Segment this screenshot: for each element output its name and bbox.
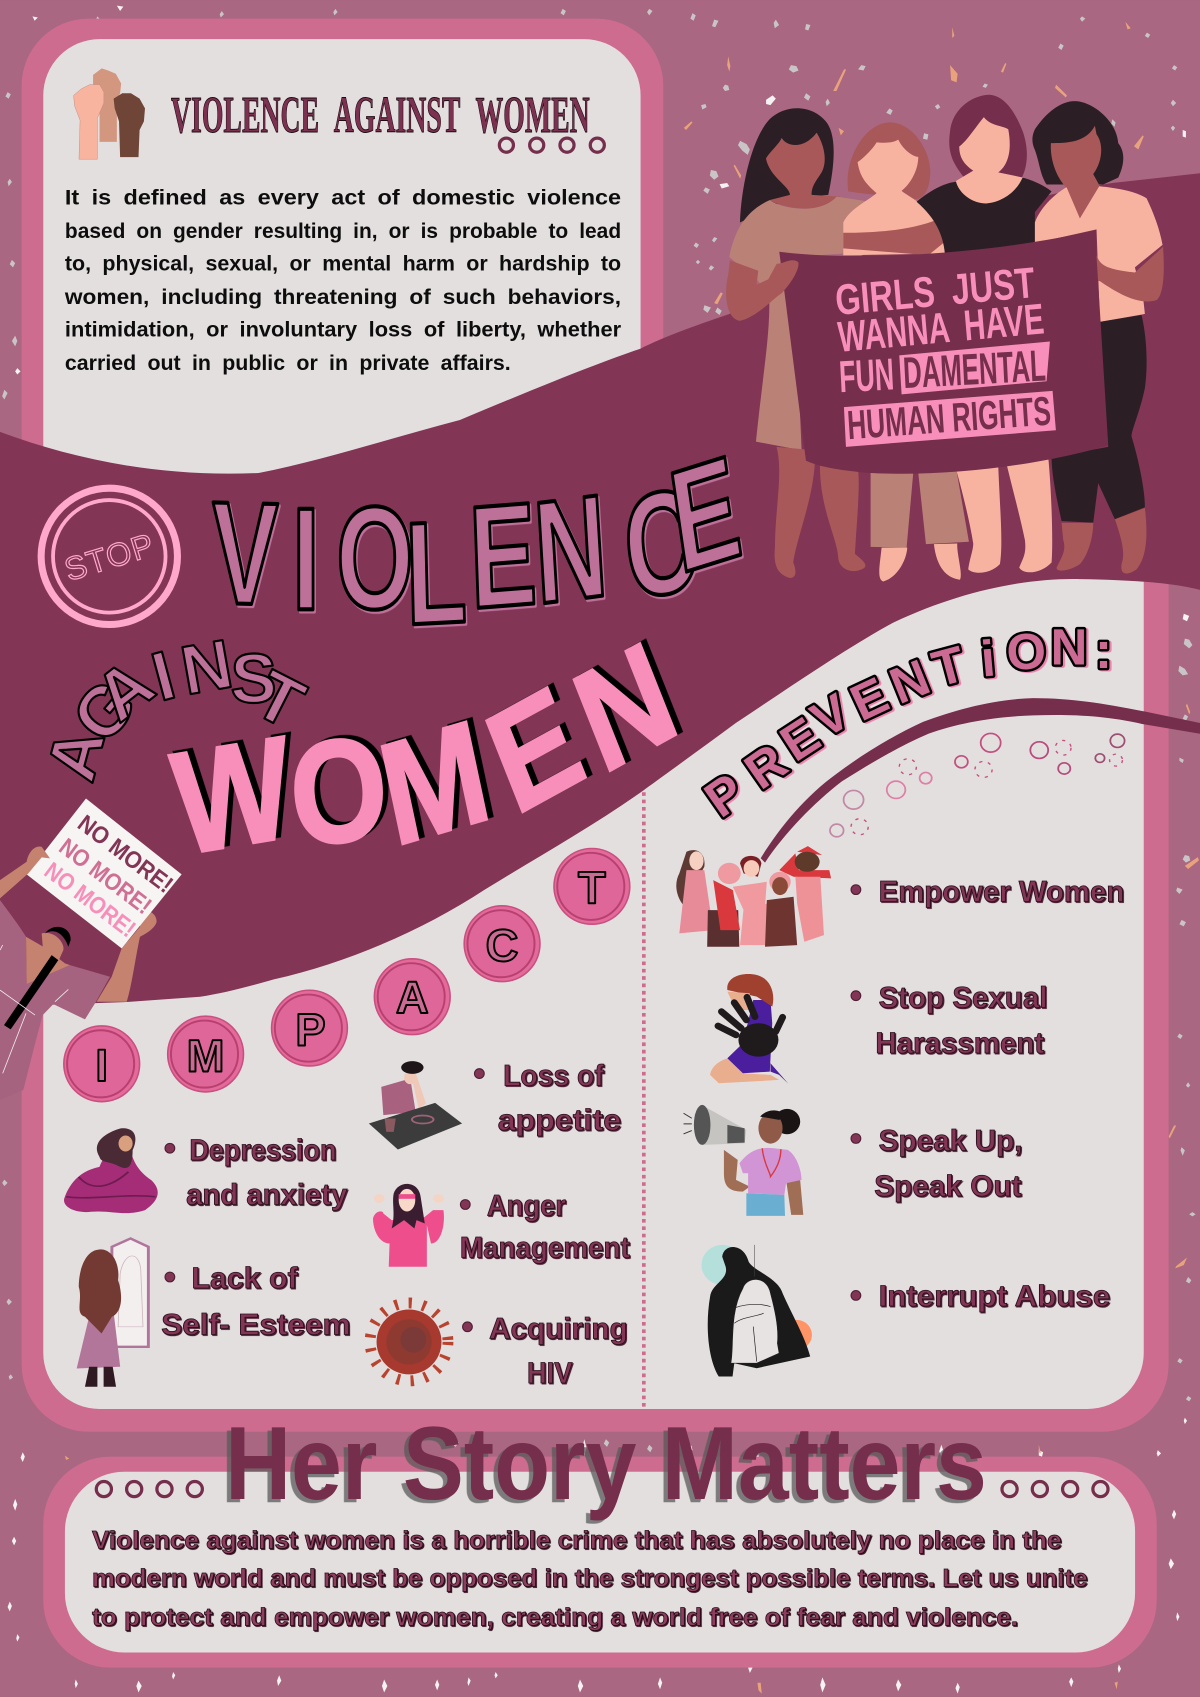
text block: closing message: Violence against women is a horrible crime that has absolutely no place in the [92,1527,1061,1555]
decorative rings: top heading [499,138,604,152]
icon: raised fists [74,68,145,159]
text block: closing message: modern world and must be opposed in the strongest possible terms. Let us unite [92,1564,1087,1592]
item: lack of self-esteem [161,1263,351,1341]
item: speak up, speak out: Speak Up, [879,1125,1023,1157]
item: lack of self-esteem: Lack of [192,1263,298,1295]
icon: woman with megaphone [684,1105,803,1216]
title: against: AGAINST [31,624,316,789]
sign [27,798,182,948]
item: acquiring hiv: Acquiring [489,1314,628,1346]
right arm [97,911,157,1002]
heading: prevention: PREVENTiON: [694,619,1112,828]
item: interrupt abuse: Interrupt Abuse [879,1281,1110,1313]
woman 1 [726,108,870,578]
prevention list text [851,877,1124,1313]
sign slogans: NO MORE! [72,810,178,899]
shirt [0,900,110,1100]
sign slogans [39,810,178,943]
badge M [168,1016,243,1092]
bottom panel frame [43,1457,1157,1668]
badge A: A [396,972,429,1023]
decorative rings: bottom right [1002,1482,1108,1497]
text block: closing message: to protect and empower women, creating a world free of fear and violence. [92,1603,1018,1631]
badge P [272,990,347,1066]
woman 2 [843,122,969,581]
icon: shadow over seated woman [701,1245,812,1377]
icon: woman not eating [369,1061,462,1149]
banner slogan [833,258,1056,448]
icon: woman at mirror [77,1238,148,1387]
head [42,933,64,965]
text block: definition: women, including threatening of such behaviors, [64,284,621,309]
item: acquiring hiv: HIV [527,1358,573,1390]
badge T [554,848,630,924]
banner slogan: DAMENTAL [902,342,1047,398]
item: loss of appetite [474,1060,621,1137]
banner slogan: GIRLS JUST [833,258,1037,324]
badge T: T [578,863,606,914]
icon: virus [370,1303,448,1381]
decorative rings: bottom left [96,1482,202,1497]
text block: definition: intimidation, or involuntary loss of liberty, whether [65,317,622,342]
sign slogans: NO MORE! [39,857,140,943]
badge P: P [295,1004,326,1055]
item: anger management [460,1190,630,1265]
stamp: stop [41,488,177,625]
badge I: I [95,1040,108,1091]
decorative bubbles [830,733,1125,837]
lower main panel frame [22,520,1169,1432]
item: speak up, speak out: Speak Out [874,1171,1022,1203]
illustration: women with banner [726,95,1164,581]
shirt highlights [0,945,68,1073]
icon: angry woman [373,1184,444,1267]
badge I [64,1026,140,1102]
sign slogans: NO MORE! [54,833,156,920]
badge C: C [486,920,518,971]
icon: depressed woman [64,1128,158,1213]
woman 4 [1032,101,1164,573]
item: anger management: Anger [487,1190,566,1222]
chest and neck [26,937,70,984]
hair [45,927,71,947]
item: speak up, speak out [851,1125,1023,1203]
item: depression and anxiety: Depression [189,1135,337,1167]
microphone [4,955,58,1029]
decorative curved line [761,698,1200,863]
banner slogan: HUMAN RIGHTS [846,389,1052,448]
text block: closing message [92,1527,1087,1631]
top panel surface [43,39,641,580]
bottom panel surface [65,1472,1135,1652]
badge A [374,959,450,1035]
item: stop sexual harassment [851,983,1047,1060]
woman 3 [917,95,1052,573]
hand over banner [767,260,799,300]
heading: violence against women: VIOLENCE AGAINST WOMEN [171,87,590,144]
text block: definition: carried out in public or in private affairs. [65,350,511,375]
item: stop sexual harassment: Harassment [875,1028,1044,1060]
item: loss of appetite: Loss of [503,1060,604,1092]
item: stop sexual harassment: Stop Sexual [879,983,1047,1015]
lower main panel surface [43,520,1144,1409]
text block: definition: to, physical, sexual, or mental harm or hardship to [65,251,621,276]
title: violence: VIOLENCE [211,425,749,656]
item: empower women: Empower Women [879,877,1124,909]
divider: dotted line [642,792,646,1409]
impact heading badges [64,848,630,1102]
banner slogan: WANNA HAVE [836,295,1046,361]
text block: definition [64,185,622,375]
badge C [464,906,540,982]
wave band [0,173,1200,1006]
top panel frame [22,19,663,581]
item: loss of appetite: appetite [498,1105,621,1137]
item: depression and anxiety: and anxiety [186,1179,348,1211]
illustration: protester with sign [0,798,182,1100]
item: lack of self-esteem: Self- Esteem [161,1309,351,1341]
impact list text [161,1060,630,1390]
item: anger management: Management [460,1233,630,1265]
text block: definition: It is defined as every act of domestic violence [65,185,621,210]
item: depression and anxiety [165,1135,348,1211]
icon: woman behind black hand [710,974,788,1084]
heading: her story matters: Her Story Matters [225,1406,987,1522]
banner slogan: FUN [838,350,895,402]
left arm [0,847,50,898]
item: acquiring hiv [463,1314,628,1390]
text block: definition: based on gender resulting in, or is probable to lead [65,218,621,243]
banner [779,230,1108,474]
badge M: M [187,1030,225,1081]
icon: group of women [676,846,831,947]
title: women: WOMEN [165,610,695,886]
stamp: stop: STOP [60,527,159,588]
